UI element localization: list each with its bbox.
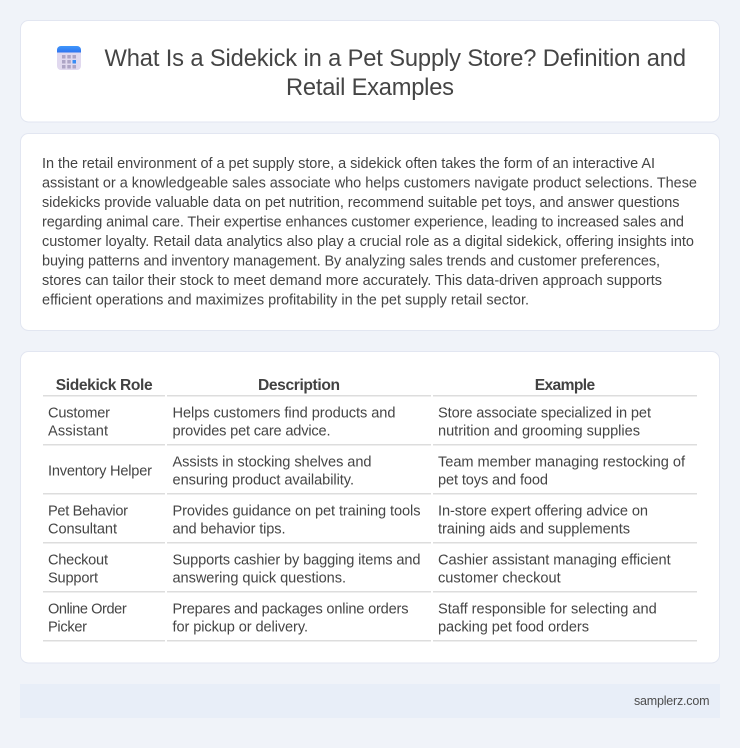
table row: customer assistant: Store associate specialized in pet <box>438 405 651 421</box>
table row: checkout support: Checkout <box>48 552 108 568</box>
table row: inventory helper: Inventory Helper <box>48 463 152 479</box>
text block: intro paragraph: regarding animal care. Their expertise enhances customer experience, leading to increased sales and <box>42 214 684 230</box>
table row: checkout support <box>43 552 697 592</box>
title: Retail Examples <box>286 75 454 101</box>
table row: online order picker: packing pet food orders <box>438 619 589 635</box>
table row: pet behavior consultant: In-store expert offering advice on <box>438 503 648 519</box>
table row: online order picker: Picker <box>48 619 87 635</box>
table row: pet behavior consultant: Pet Behavior <box>48 503 128 519</box>
table header row: Sidekick Role <box>56 377 153 394</box>
table row: customer assistant: Helps customers find products and <box>172 405 396 421</box>
table row: online order picker: Online Order <box>48 601 127 617</box>
title: What Is a Sidekick in a Pet Supply Store? Definition and <box>104 46 686 72</box>
table row: inventory helper: ensuring product availability. <box>172 472 354 488</box>
table row: checkout support: Supports cashier by bagging items and <box>172 552 420 568</box>
panel: sidekick roles table card <box>20 352 720 663</box>
text block: intro paragraph: stores can tailor their stock to meet demand more accurately. This data-driven approach supports <box>42 273 662 289</box>
table row: customer assistant: nutrition and grooming supplies <box>438 423 640 439</box>
footer text: site name: samplerz.com <box>634 694 710 708</box>
icon: calendar <box>57 46 81 70</box>
text block: intro paragraph: customer loyalty. Retail data analytics also play a crucial role as a digital sidekick, offering insights into <box>42 234 694 250</box>
table header row: Description <box>258 377 340 394</box>
table row: online order picker: for pickup or delivery. <box>172 619 308 635</box>
text block: intro paragraph: In the retail environment of a pet supply store, a sidekick often takes the form of an interactive AI <box>42 156 655 172</box>
table row: checkout support: Support <box>48 570 98 586</box>
footer bar <box>20 684 720 718</box>
table row: customer assistant <box>43 405 697 446</box>
table header row <box>43 377 697 396</box>
table row: pet behavior consultant: training aids and supplements <box>438 521 630 537</box>
table row: online order picker: Staff responsible for selecting and <box>438 601 657 617</box>
table row: customer assistant: provides pet care advice. <box>172 423 330 439</box>
table row: inventory helper: Team member managing restocking of <box>438 454 686 470</box>
table row: customer assistant: Customer <box>48 405 110 421</box>
table row: inventory helper: Assists in stocking shelves and <box>172 454 372 470</box>
table row: online order picker: Prepares and packages online orders <box>172 601 408 617</box>
table row: inventory helper <box>43 454 697 494</box>
table row: checkout support: customer checkout <box>438 570 561 586</box>
table header row: Example <box>535 377 596 394</box>
table row: pet behavior consultant: and behavior tips. <box>172 521 286 537</box>
text block: intro paragraph <box>42 156 697 308</box>
text block: intro paragraph: efficient operations and maximizes profitability in the pet supply retail sector. <box>42 292 529 308</box>
table row: pet behavior consultant: Consultant <box>48 521 117 537</box>
table row: checkout support: Cashier assistant managing efficient <box>438 552 671 568</box>
table row: pet behavior consultant: Provides guidance on pet training tools <box>172 503 420 519</box>
table row: inventory helper: pet toys and food <box>438 472 548 488</box>
panel: intro paragraph card <box>20 134 720 330</box>
text block: intro paragraph: sidekicks provide valuable data on pet nutrition, recommend suitable pet toys, and answer questions <box>42 195 680 211</box>
panel: title card <box>20 20 720 122</box>
table row: customer assistant: Assistant <box>48 423 108 439</box>
title <box>104 46 686 101</box>
table row: checkout support: answering quick questions. <box>172 570 346 586</box>
table row: pet behavior consultant <box>43 503 697 544</box>
text block: intro paragraph: buying patterns and inventory management. By analyzing sales trends and customer preferences, <box>42 253 660 269</box>
table row: online order picker <box>43 601 697 642</box>
text block: intro paragraph: assistant or a knowledgeable sales associate who helps customers navigate product selections. These <box>42 175 697 191</box>
